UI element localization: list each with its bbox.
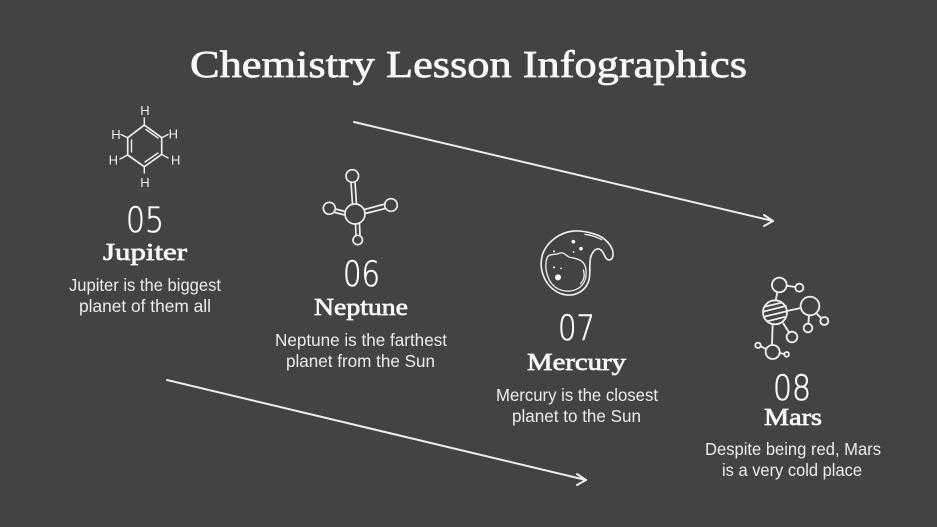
heading: Jupiter: Jupiter [103,240,187,266]
heading: Neptune: Neptune [314,295,408,321]
panel: Neptune [275,170,447,371]
number 08: 08 [773,369,811,409]
icon: benzene: H [140,103,150,118]
text block: Mercury: planet to the Sun [512,406,641,426]
text block: Mars: is a very cold place [722,460,862,480]
number 06: 06 [343,255,380,295]
icon: benzene: H [140,175,150,190]
title: Chemistry Lesson Infographics [190,44,747,86]
text block: Neptune: planet from the Sun [286,351,435,371]
text block: Mercury [496,385,658,426]
number 05: 05 [126,201,164,241]
icon: benzene: H [171,152,180,168]
heading: Mars: Mars [764,405,822,431]
text block: Mercury: Mercury is the closest [496,385,658,405]
heading: Mercury: Mercury [527,350,626,376]
text block: Jupiter [69,275,221,316]
text block: Mars [705,439,881,480]
text block: Jupiter: Jupiter is the biggest [69,275,221,295]
number 07: 07 [558,309,595,349]
panel: Jupiter [69,103,221,316]
text block: Jupiter: planet of them all [79,296,211,316]
panel: Mars [705,278,881,480]
arrow: bottom [167,380,586,485]
icon: molecular network [755,278,828,359]
text block: Mars: Despite being red, Mars [705,439,881,459]
icon: benzene: H [111,127,121,142]
panel: Mercury [496,231,658,426]
icon: benzene: H [109,152,118,168]
icon: molecule [323,170,397,245]
text block: Neptune: Neptune is the farthest [275,330,447,350]
text block: Neptune [275,330,447,371]
arrow: top [354,122,773,226]
icon: round flask [541,231,613,295]
icon: benzene [109,103,180,190]
icon: benzene: H [169,126,178,142]
